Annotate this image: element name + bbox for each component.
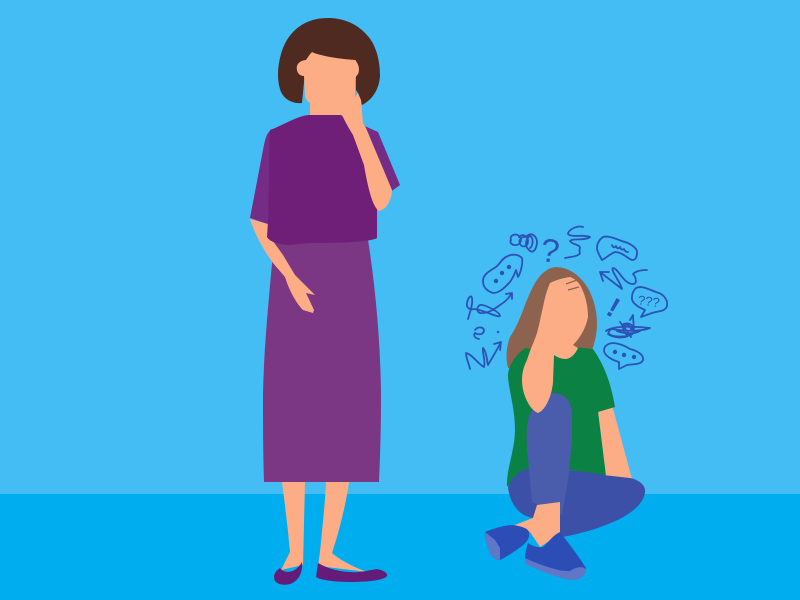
thigh on floor xyxy=(508,469,645,537)
figure: standing mother xyxy=(250,18,400,585)
left shoe sole xyxy=(485,532,500,560)
bottom speech bubble xyxy=(604,343,643,369)
small dot xyxy=(497,331,499,333)
hair xyxy=(278,18,380,105)
face, hand and arm holding head xyxy=(522,277,588,413)
question bubble xyxy=(632,287,667,317)
squiggle xyxy=(565,227,590,258)
dots in bottom bubble xyxy=(613,350,636,359)
question marks in bubble: ??? xyxy=(637,292,661,310)
left speech bubble xyxy=(483,255,522,293)
arrow squiggle right xyxy=(600,268,647,289)
tangled knot doodle xyxy=(510,234,537,252)
legs xyxy=(281,482,368,572)
back arm xyxy=(598,405,632,479)
skirt xyxy=(263,240,381,482)
top-right speech bubble xyxy=(597,237,637,260)
green t-shirt xyxy=(507,347,615,487)
floor xyxy=(0,494,800,600)
raised arm and hand xyxy=(337,82,392,211)
worry doodles xyxy=(466,227,667,369)
right shoe xyxy=(525,532,586,578)
squiggle arrow left xyxy=(467,293,512,319)
hair xyxy=(507,267,597,368)
raised leg xyxy=(527,393,572,515)
shoes xyxy=(274,562,387,585)
top-right bubble marks xyxy=(612,245,628,252)
right shoe sole xyxy=(525,558,586,580)
question mark: ? xyxy=(538,231,562,270)
blouse xyxy=(267,115,377,245)
right sleeve xyxy=(360,124,400,196)
finger gaps xyxy=(566,280,579,290)
left hook doodle xyxy=(474,327,484,339)
left arm and hand xyxy=(250,219,315,313)
left sleeve xyxy=(250,129,285,225)
figure: seated daughter xyxy=(485,267,645,580)
face and neck xyxy=(297,52,359,116)
left shoe xyxy=(485,525,529,560)
ankle and foot xyxy=(512,502,560,547)
zigzag arrow xyxy=(466,342,501,369)
exclamation mark: ! xyxy=(602,292,625,323)
scribble xyxy=(606,315,650,337)
dots in left bubble xyxy=(494,265,511,283)
